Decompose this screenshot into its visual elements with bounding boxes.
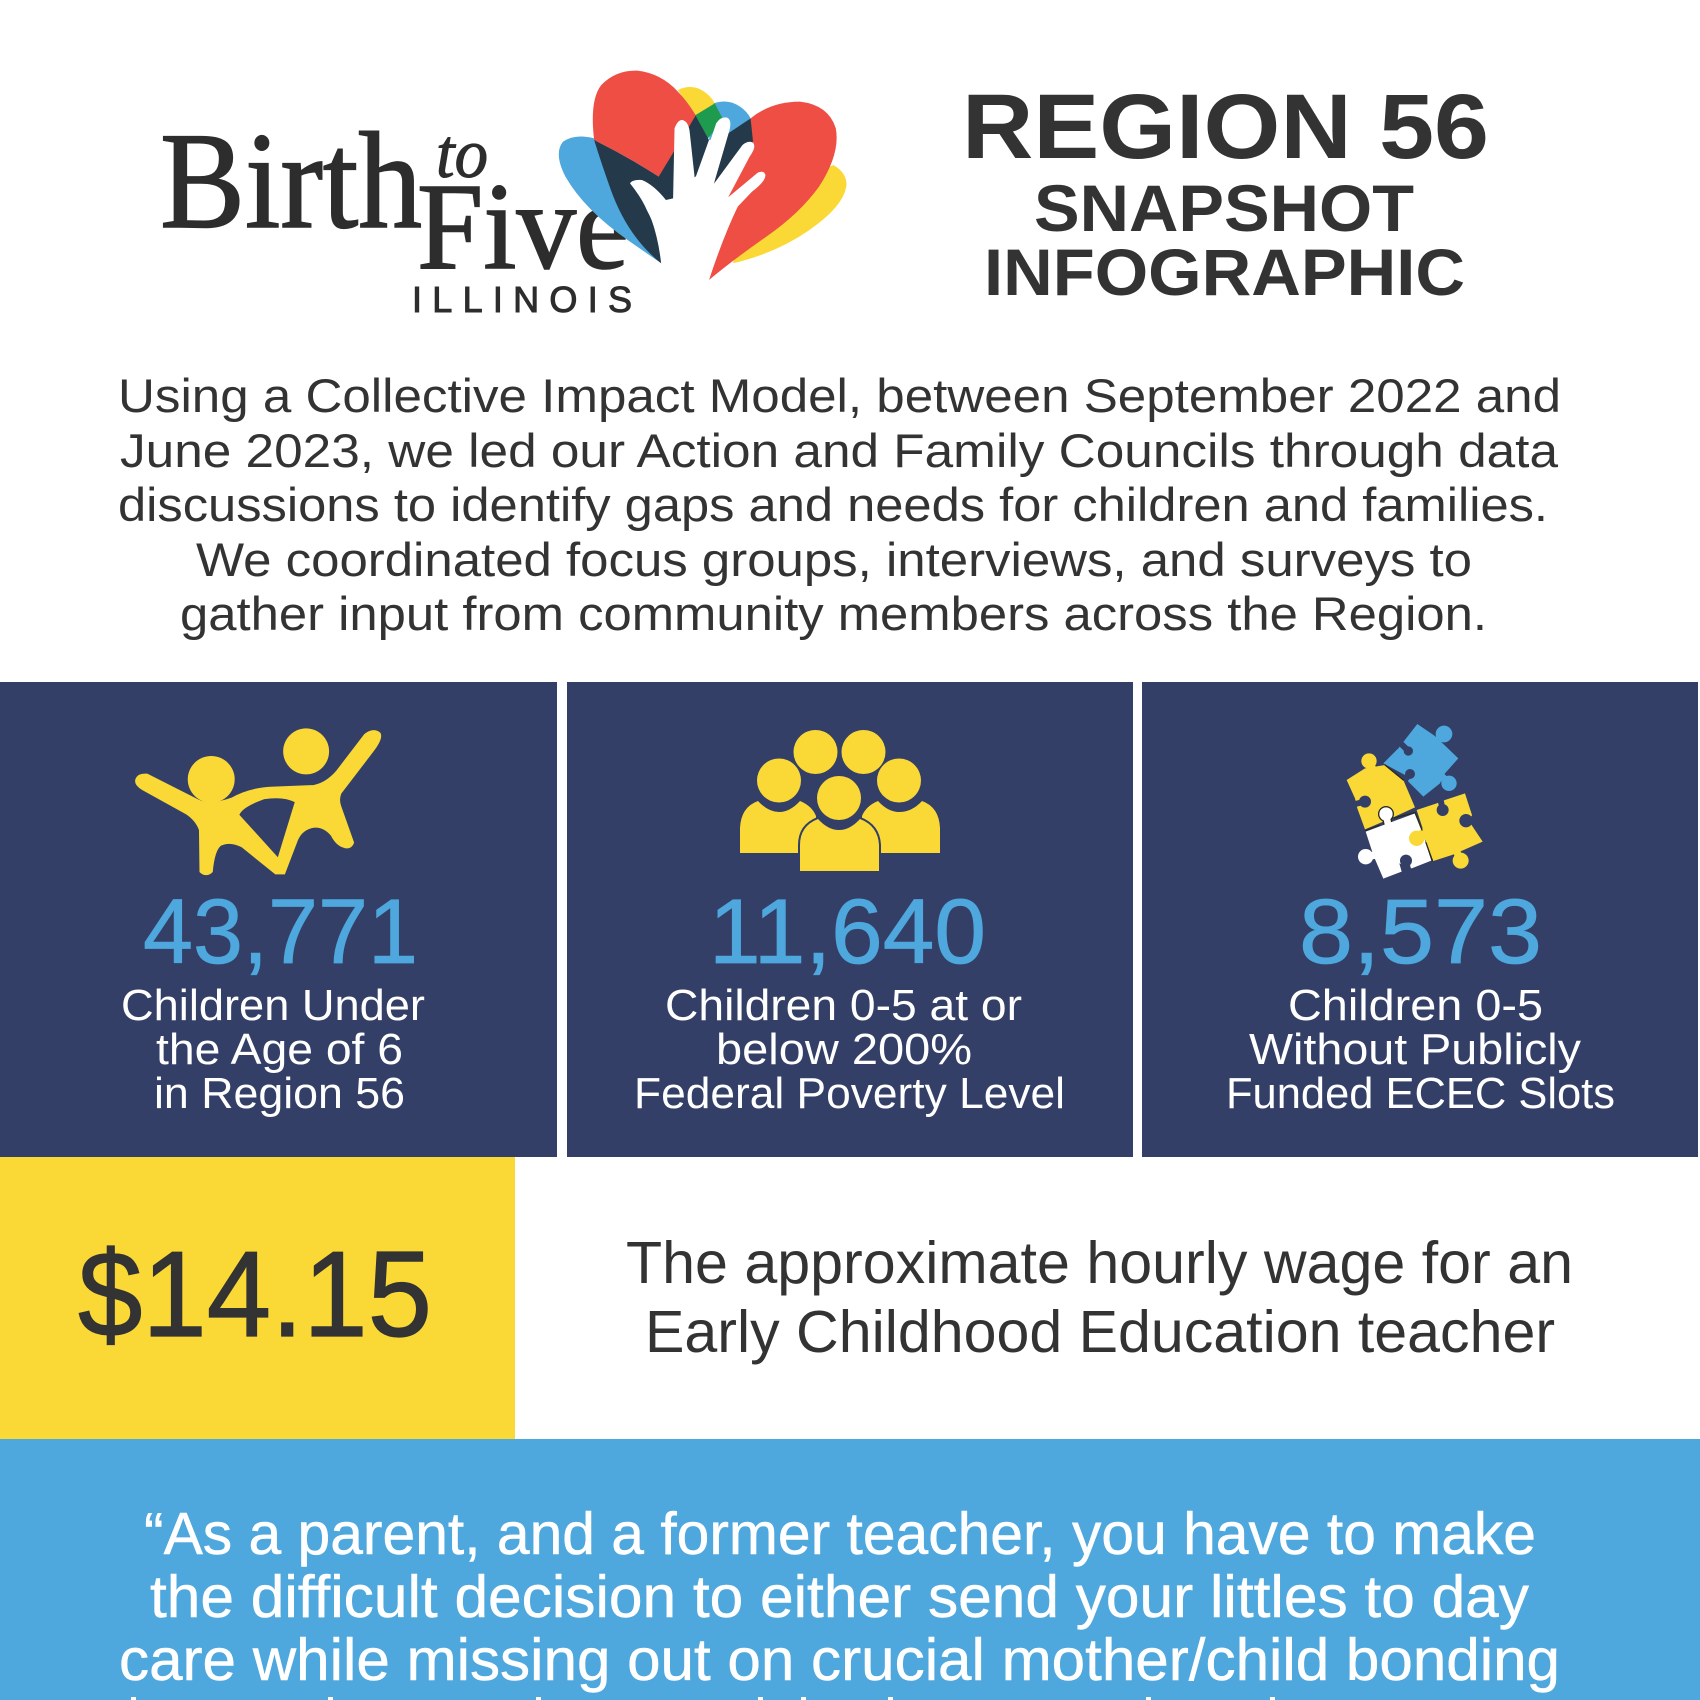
quote text: “As a parent, and a former teacher, you have to make — [144, 1501, 1536, 1567]
label: no publicly funded ECEC slots — [1226, 981, 1615, 1118]
label: no publicly funded ECEC slots: Without Publicly — [1249, 1025, 1581, 1074]
icon: group of people — [740, 730, 940, 871]
intro paragraph: June 2023, we led our Action and Family Councils through data — [120, 424, 1559, 477]
intro paragraph — [118, 369, 1561, 640]
panel: children at or below 200% poverty — [567, 682, 1133, 1157]
blue piece — [1383, 724, 1458, 797]
yellow left piece — [1347, 753, 1415, 829]
logo: Birth to Five Illinois — [160, 71, 846, 320]
label: children under the age of 6: Children Under — [121, 981, 425, 1030]
panel: children without publicly funded slots — [1142, 682, 1698, 1157]
quote text: the difficult decision to either send your littles to day — [150, 1564, 1529, 1630]
panel: children under 6 — [0, 682, 557, 1157]
wage description: The approximate hourly wage for an — [626, 1230, 1573, 1296]
title: Region 56 Snapshot Infographic — [962, 76, 1489, 309]
wage description — [626, 1230, 1573, 1365]
label: children under the age of 6: the Age of 6 — [156, 1025, 403, 1074]
label: poverty level: Federal Poverty Level — [634, 1069, 1065, 1118]
logo wordmark: ILLINOIS — [412, 279, 632, 320]
label: poverty level — [634, 981, 1065, 1118]
label: children under the age of 6: in Region 56 — [154, 1069, 405, 1118]
intro paragraph: We coordinated focus groups, interviews, and surveys to — [196, 533, 1472, 586]
logo wordmark: Birth — [160, 104, 422, 257]
statistic: 43,771: 43,771 — [143, 881, 418, 983]
logo wordmark: to — [436, 116, 488, 193]
statistic: 8,573: 8,573 — [1299, 881, 1542, 983]
label: no publicly funded ECEC slots: Funded ECEC Slots — [1226, 1069, 1615, 1118]
yellow right piece — [1409, 793, 1483, 869]
title: Region 56 Snapshot Infographic: SNAPSHOT — [1034, 171, 1414, 245]
label: children under the age of 6 — [121, 981, 425, 1118]
label: no publicly funded ECEC slots: Children 0-5 — [1288, 981, 1543, 1030]
logo wordmark: Five — [417, 158, 629, 295]
wage description: Early Childhood Education teacher — [645, 1299, 1555, 1365]
quote text: care while missing out on crucial mother/child bonding — [119, 1627, 1560, 1693]
label: poverty level: below 200% — [716, 1025, 972, 1074]
logo wordmark — [160, 104, 632, 320]
panel: parent quote — [0, 1439, 1700, 1700]
white piece — [1358, 806, 1431, 879]
icon: puzzle pieces — [1347, 724, 1483, 879]
logo icon: overlapping hearts and hand — [559, 71, 846, 280]
title: Region 56 Snapshot Infographic: INFOGRAPHIC — [984, 235, 1465, 309]
statistic: 11,640: 11,640 — [709, 881, 986, 983]
statistic: $14.15: $14.15 — [78, 1226, 432, 1362]
quote text — [119, 1501, 1560, 1693]
title: Region 56 Snapshot Infographic: REGION 56 — [962, 76, 1489, 178]
intro paragraph: discussions to identify gaps and needs for children and families. — [118, 478, 1548, 531]
label: poverty level: Children 0-5 at or — [665, 981, 1022, 1030]
panel: hourly wage — [0, 1157, 1573, 1439]
icon: two children — [137, 728, 380, 874]
intro paragraph: Using a Collective Impact Model, between September 2022 and — [118, 369, 1561, 422]
intro paragraph: gather input from community members across the Region. — [180, 587, 1487, 640]
